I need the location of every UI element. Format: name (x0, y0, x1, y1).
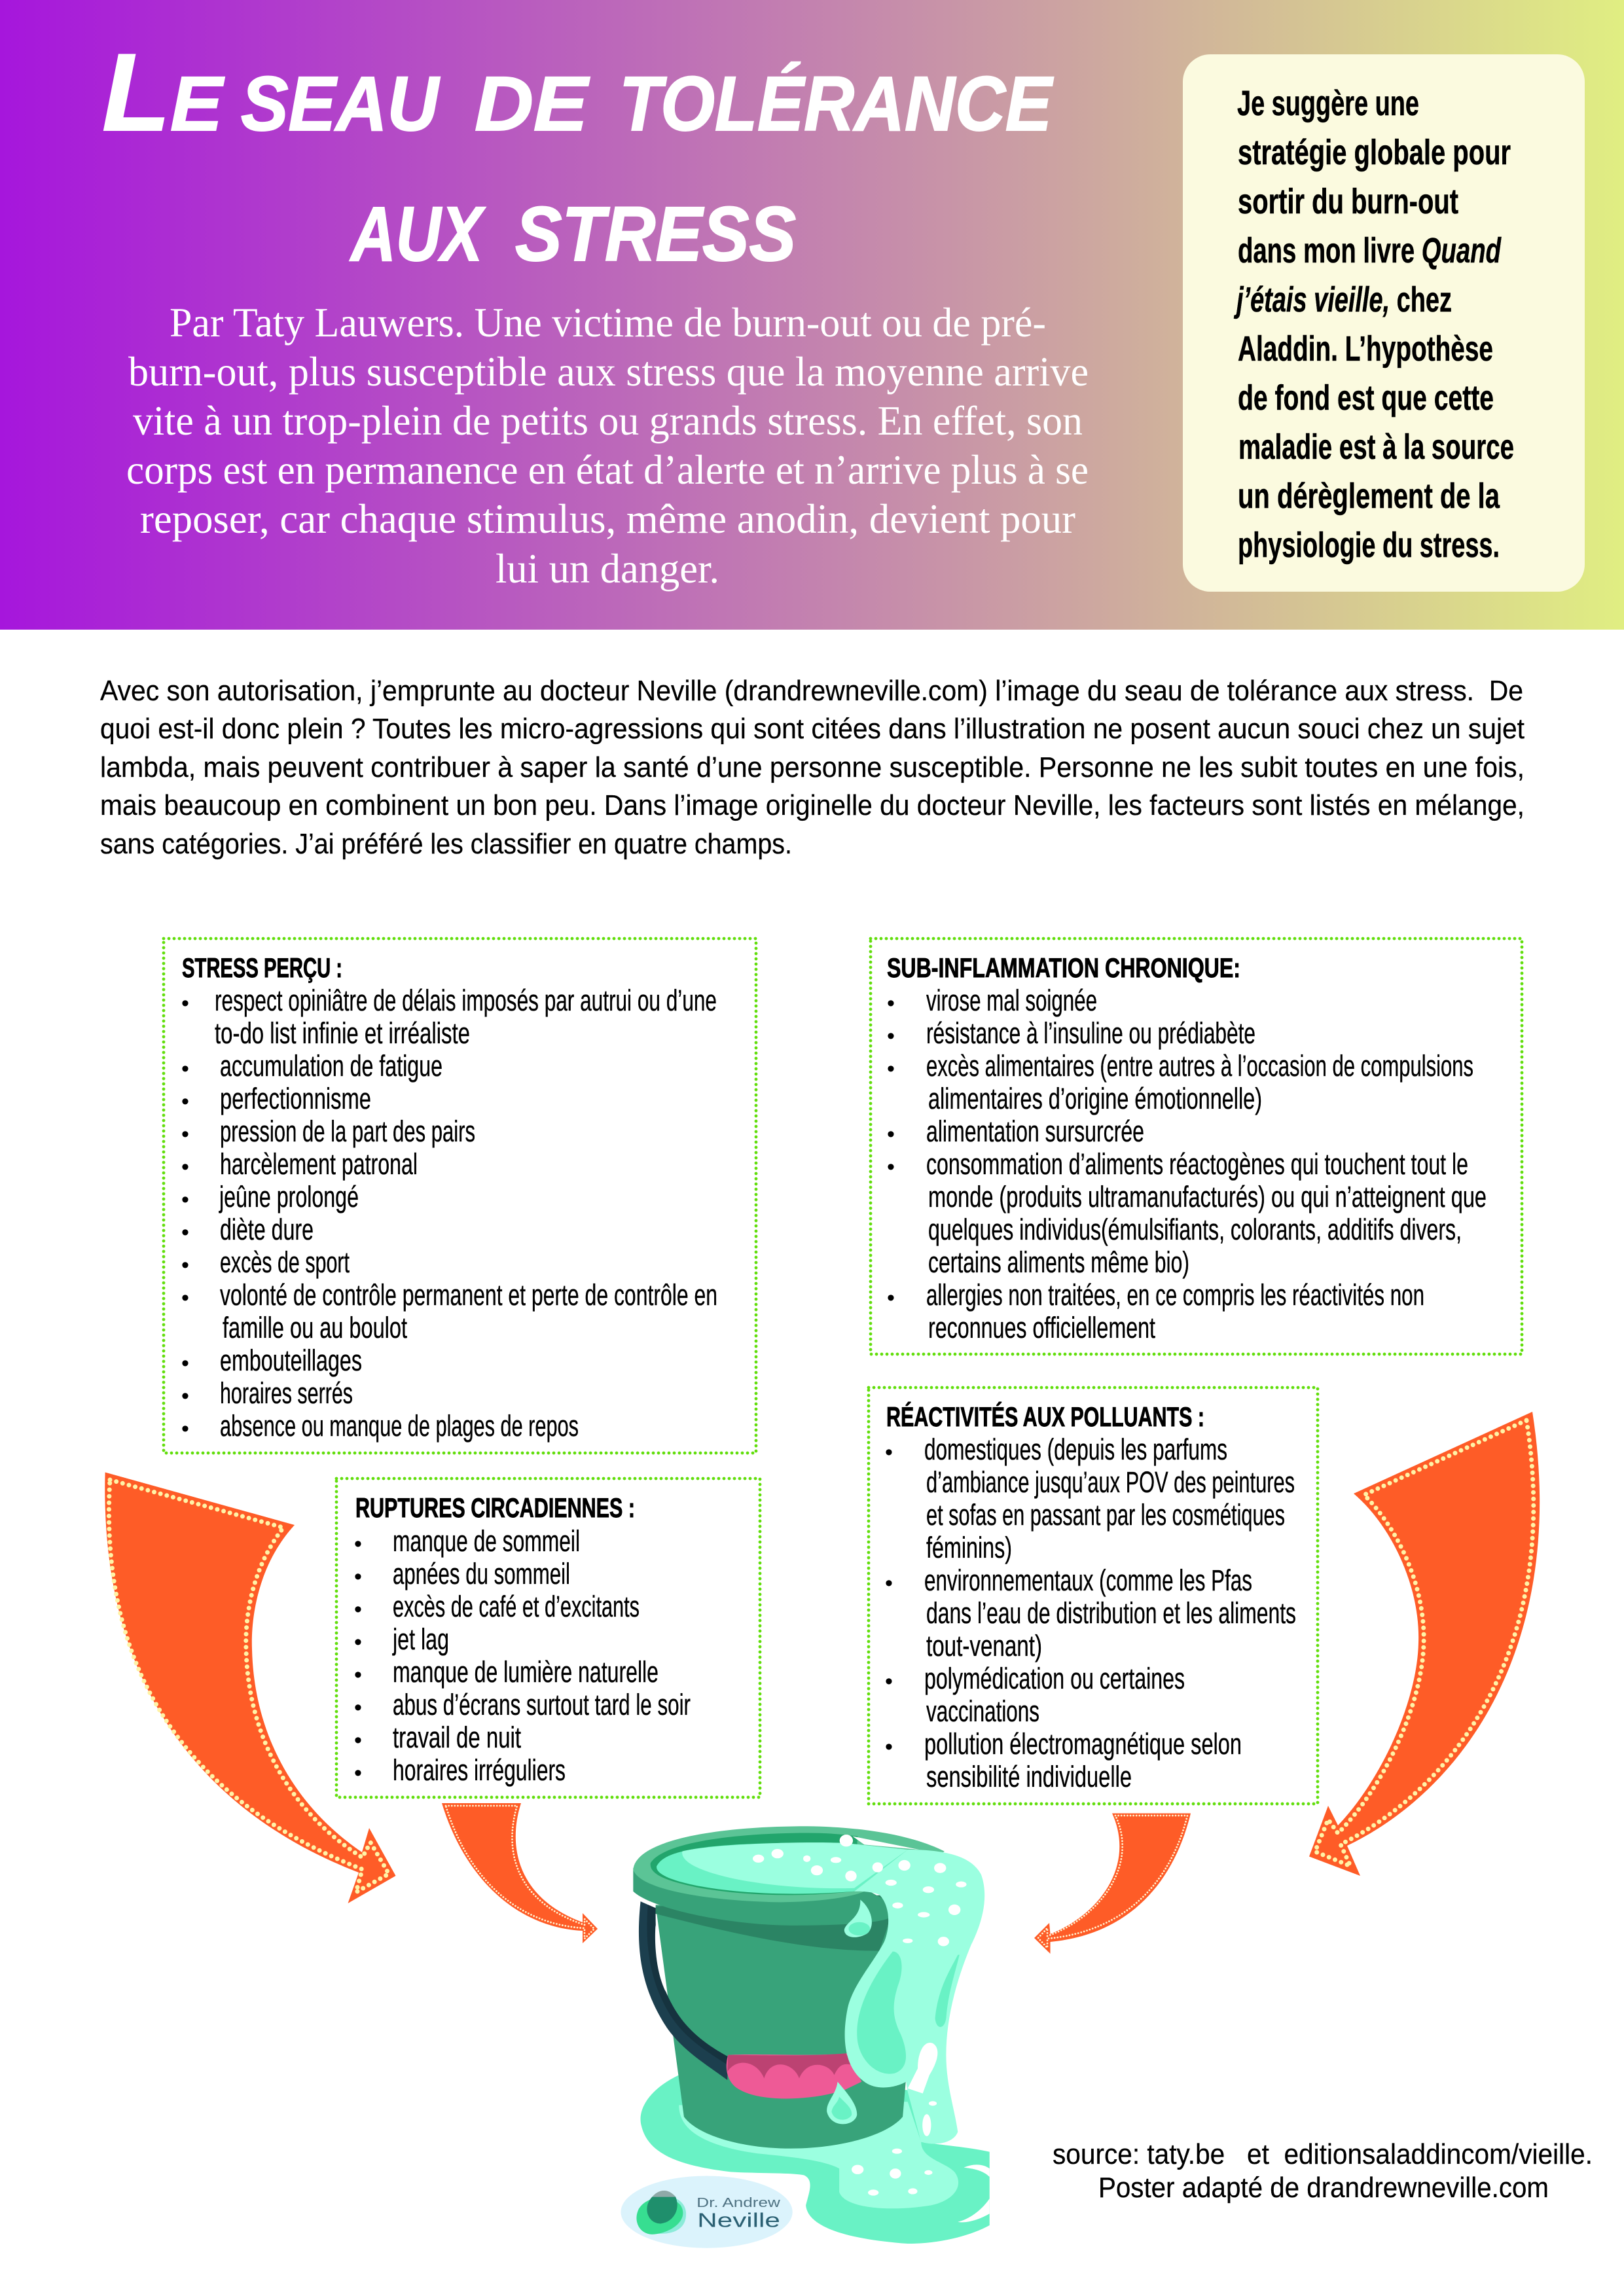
header intro paragraph: Par Taty Lauwers. Une victime de burn-out ou de pré- (170, 299, 1046, 346)
arrow: large left (105, 1473, 395, 1903)
list: stress perçu: diète dure (220, 1213, 314, 1246)
heading: ruptures circadiennes: RUPTURES CIRCADIENNES : (355, 1492, 635, 1523)
title: de (475, 31, 590, 154)
pink handle grip (727, 2053, 861, 2098)
list: ruptures circadiennes: abus d’écrans surtout tard le soir (393, 1688, 691, 1721)
list: stress perçu: • (181, 1351, 189, 1376)
list: stress perçu: • (181, 1056, 189, 1081)
list: réactivités aux polluants: environnementaux (comme les Pfas (924, 1564, 1252, 1597)
list: ruptures circadiennes: horaires irréguliers (393, 1753, 566, 1787)
header intro paragraph: reposer, car chaque stimulus, même anodin, devient pour (140, 495, 1075, 542)
source note: source: taty.be et editionsaladdincom/vieille. (1053, 2138, 1593, 2170)
list: stress perçu: • (181, 1187, 189, 1212)
list: stress perçu: volonté de contrôle permanent et perte de contrôle en (220, 1278, 717, 1312)
list: stress perçu: • (181, 1220, 189, 1245)
list: ruptures circadiennes: manque de sommeil (393, 1524, 580, 1558)
list: sub-inflammation chronique: • (887, 1285, 895, 1310)
list: stress perçu: • (181, 1416, 189, 1441)
header intro paragraph: vite à un trop-plein de petits ou grands stress. En effet, son (133, 397, 1083, 444)
logo: Dr. Andrew Neville: Dr. Andrew (696, 2196, 780, 2210)
list: ruptures circadiennes: • (354, 1564, 362, 1589)
introduction text: lambda, mais peuvent contribuer à saper la santé d’une personne susceptible. Personne ne les subit toutes en une fois, (100, 751, 1525, 783)
list: réactivités aux polluants: tout-venant) (926, 1629, 1042, 1662)
list: stress perçu: • (181, 1253, 189, 1278)
title: stress (515, 161, 796, 284)
list: stress perçu: accumulation de fatigue (220, 1049, 442, 1083)
list: sub-inflammation chronique: virose mal soignée (926, 984, 1097, 1017)
overflowing water (845, 1850, 984, 2144)
bucket body (656, 1905, 906, 2149)
introduction text (100, 675, 1525, 860)
list: ruptures circadiennes: manque de lumière naturelle (393, 1655, 659, 1689)
list: ruptures circadiennes: apnées du sommeil (393, 1557, 570, 1590)
title: aux (350, 161, 486, 284)
list: ruptures circadiennes: travail de nuit (393, 1721, 521, 1754)
logo: Dr. Andrew Neville: Neville (697, 2210, 780, 2232)
list: sub-inflammation chronique: allergies non traitées, en ce compris les réactivités non (926, 1278, 1424, 1312)
list: stress perçu: respect opiniâtre de délais imposés par autrui ou d’une (215, 984, 717, 1017)
introduction text: mais beaucoup en combinent un bon peu. Dans l’image originelle du docteur Neville, les facteurs sont listés en mélange, (100, 789, 1525, 821)
list: stress perçu: • (181, 1155, 189, 1179)
list: ruptures circadiennes: • (354, 1761, 362, 1785)
list: réactivités aux polluants: d’ambiance jusqu’aux POV des peintures (926, 1465, 1295, 1499)
list: réactivités aux polluants: pollution électromagnétique selon (924, 1727, 1242, 1761)
water puddle (641, 2075, 990, 2244)
list: stress perçu: perfectionnisme (220, 1082, 371, 1115)
callout: book suggestion: sortir du burn-out (1238, 182, 1458, 221)
header band (0, 0, 1624, 630)
list: ruptures circadiennes: • (354, 1728, 362, 1753)
callout: book suggestion: Aladdin. L’hypothèse (1238, 329, 1493, 368)
introduction text: sans catégories. J’ai préféré les classifier en quatre champs. (100, 828, 792, 860)
list: stress perçu: embouteillages (220, 1344, 362, 1377)
list: ruptures circadiennes: • (354, 1630, 362, 1655)
list: stress perçu: jeûne prolongé (219, 1180, 359, 1213)
panel: stress perçu (164, 939, 756, 1453)
illustration: overflowing bucket (621, 1826, 990, 2248)
source note: Poster adapté de drandrewneville.com (1098, 2172, 1549, 2204)
list: réactivités aux polluants: et sofas en passant par les cosmétiques (926, 1498, 1285, 1532)
list: réactivités aux polluants: dans l’eau de distribution et les aliments (926, 1596, 1296, 1630)
list: stress perçu: famille ou au boulot (223, 1311, 407, 1344)
title (102, 31, 1054, 284)
callout: book suggestion (1183, 54, 1585, 592)
list: sub-inflammation chronique: reconnues officiellement (928, 1311, 1155, 1344)
callout: book suggestion: Je suggère une (1237, 84, 1419, 123)
list: réactivités aux polluants: • (885, 1734, 893, 1759)
list: stress perçu: • (181, 1285, 189, 1310)
list: stress perçu: absence ou manque de plages de repos (220, 1409, 579, 1443)
list: stress perçu (181, 984, 717, 1443)
list: réactivités aux polluants: féminins) (926, 1531, 1012, 1564)
callout: book suggestion: dans mon livre Quand (1238, 231, 1502, 270)
list: sub-inflammation chronique: • (887, 1155, 895, 1179)
title: seau (241, 31, 441, 154)
list: ruptures circadiennes: • (354, 1532, 362, 1556)
foam bubbles (753, 1835, 967, 2196)
source note (1053, 2138, 1593, 2204)
arrow: small left (442, 1803, 598, 1943)
list: stress perçu: • (181, 1089, 189, 1114)
list: sub-inflammation chronique: certains aliments même bio) (928, 1246, 1189, 1279)
list: réactivités aux polluants: vaccinations (926, 1695, 1039, 1728)
list: stress perçu: • (181, 1122, 189, 1147)
handle (639, 1901, 728, 2080)
list: sub-inflammation chronique: • (887, 991, 895, 1016)
list: sub-inflammation chronique: alimentation sursurcrée (926, 1115, 1144, 1148)
bucket rim (633, 1826, 945, 1926)
callout: book suggestion: de fond est que cette (1238, 378, 1494, 418)
introduction text: Avec son autorisation, j’emprunte au docteur Neville (drandrewneville.com) l’image du seau de tolérance aux stress. De (100, 675, 1523, 707)
list: ruptures circadiennes: • (354, 1695, 362, 1720)
list: sub-inflammation chronique: alimentaires d’origine émotionnelle) (928, 1082, 1262, 1115)
list: ruptures circadiennes: • (354, 1662, 362, 1687)
heading: stress perçu: STRESS PERÇU : (182, 952, 342, 983)
header intro paragraph: lui un danger. (496, 545, 719, 592)
callout: book suggestion: un dérèglement de la (1238, 476, 1500, 516)
title: Le (102, 31, 225, 154)
list: réactivités aux polluants: • (885, 1669, 893, 1694)
bucket shadow band (656, 1895, 890, 1951)
callout: book suggestion: maladie est à la source (1238, 427, 1514, 467)
list: stress perçu: • (181, 1384, 189, 1408)
list: réactivités aux polluants (885, 1433, 1296, 1793)
title: tolérance (619, 31, 1054, 154)
list: sub-inflammation chronique: • (887, 1024, 895, 1049)
list: ruptures circadiennes: excès de café et d’excitants (393, 1590, 640, 1623)
header intro paragraph: corps est en permanence en état d’alerte et n’arrive plus à se (126, 446, 1089, 493)
list: stress perçu: excès de sport (220, 1246, 350, 1279)
droplets (827, 1900, 872, 2124)
list: réactivités aux polluants: polymédication ou certaines (924, 1662, 1185, 1695)
list: sub-inflammation chronique: résistance à l’insuline ou prédiabète (926, 1016, 1255, 1050)
panel: ruptures circadiennes (336, 1479, 760, 1797)
header intro paragraph (126, 299, 1089, 592)
callout: book suggestion: j’étais vieille, chez (1234, 280, 1452, 319)
callout: book suggestion: physiologie du stress. (1238, 526, 1500, 565)
list: stress perçu: to-do list infinie et irréaliste (215, 1016, 470, 1050)
list: réactivités aux polluants: • (885, 1440, 893, 1465)
list: stress perçu: pression de la part des pairs (220, 1115, 475, 1148)
list: ruptures circadiennes: jet lag (392, 1623, 449, 1656)
arrow: large right (1309, 1412, 1540, 1876)
panel: sub-inflammation chronique (871, 939, 1522, 1354)
callout: book suggestion: stratégie globale pour (1238, 133, 1511, 172)
list: réactivités aux polluants: • (885, 1571, 893, 1596)
list: réactivités aux polluants: domestiques (depuis les parfums (924, 1433, 1227, 1466)
introduction text: quoi est-il donc plein ? Toutes les micro-agressions qui sont citées dans l’illustration ne posent aucun souci chez un sujet (100, 713, 1525, 745)
arrow: small right (1034, 1813, 1191, 1954)
heading: réactivités aux polluants: RÉACTIVITÉS AUX POLLUANTS : (886, 1401, 1204, 1432)
list: ruptures circadiennes (354, 1524, 691, 1787)
list: sub-inflammation chronique (887, 984, 1487, 1344)
list: réactivités aux polluants: sensibilité individuelle (926, 1760, 1132, 1793)
panel: réactivités aux polluants (869, 1388, 1318, 1804)
logo: Dr. Andrew Neville (621, 2176, 793, 2248)
list: sub-inflammation chronique: • (887, 1122, 895, 1147)
list: sub-inflammation chronique: • (887, 1056, 895, 1081)
list: ruptures circadiennes: • (354, 1597, 362, 1622)
header intro paragraph: burn-out, plus susceptible aux stress que la moyenne arrive (128, 348, 1089, 395)
heading: sub-inflammation chronique: SUB-INFLAMMATION CHRONIQUE: (887, 952, 1240, 983)
water surface (657, 1842, 908, 1893)
list: stress perçu: • (181, 991, 189, 1016)
list: stress perçu: horaires serrés (220, 1376, 353, 1410)
list: stress perçu: harcèlement patronal (220, 1147, 418, 1181)
